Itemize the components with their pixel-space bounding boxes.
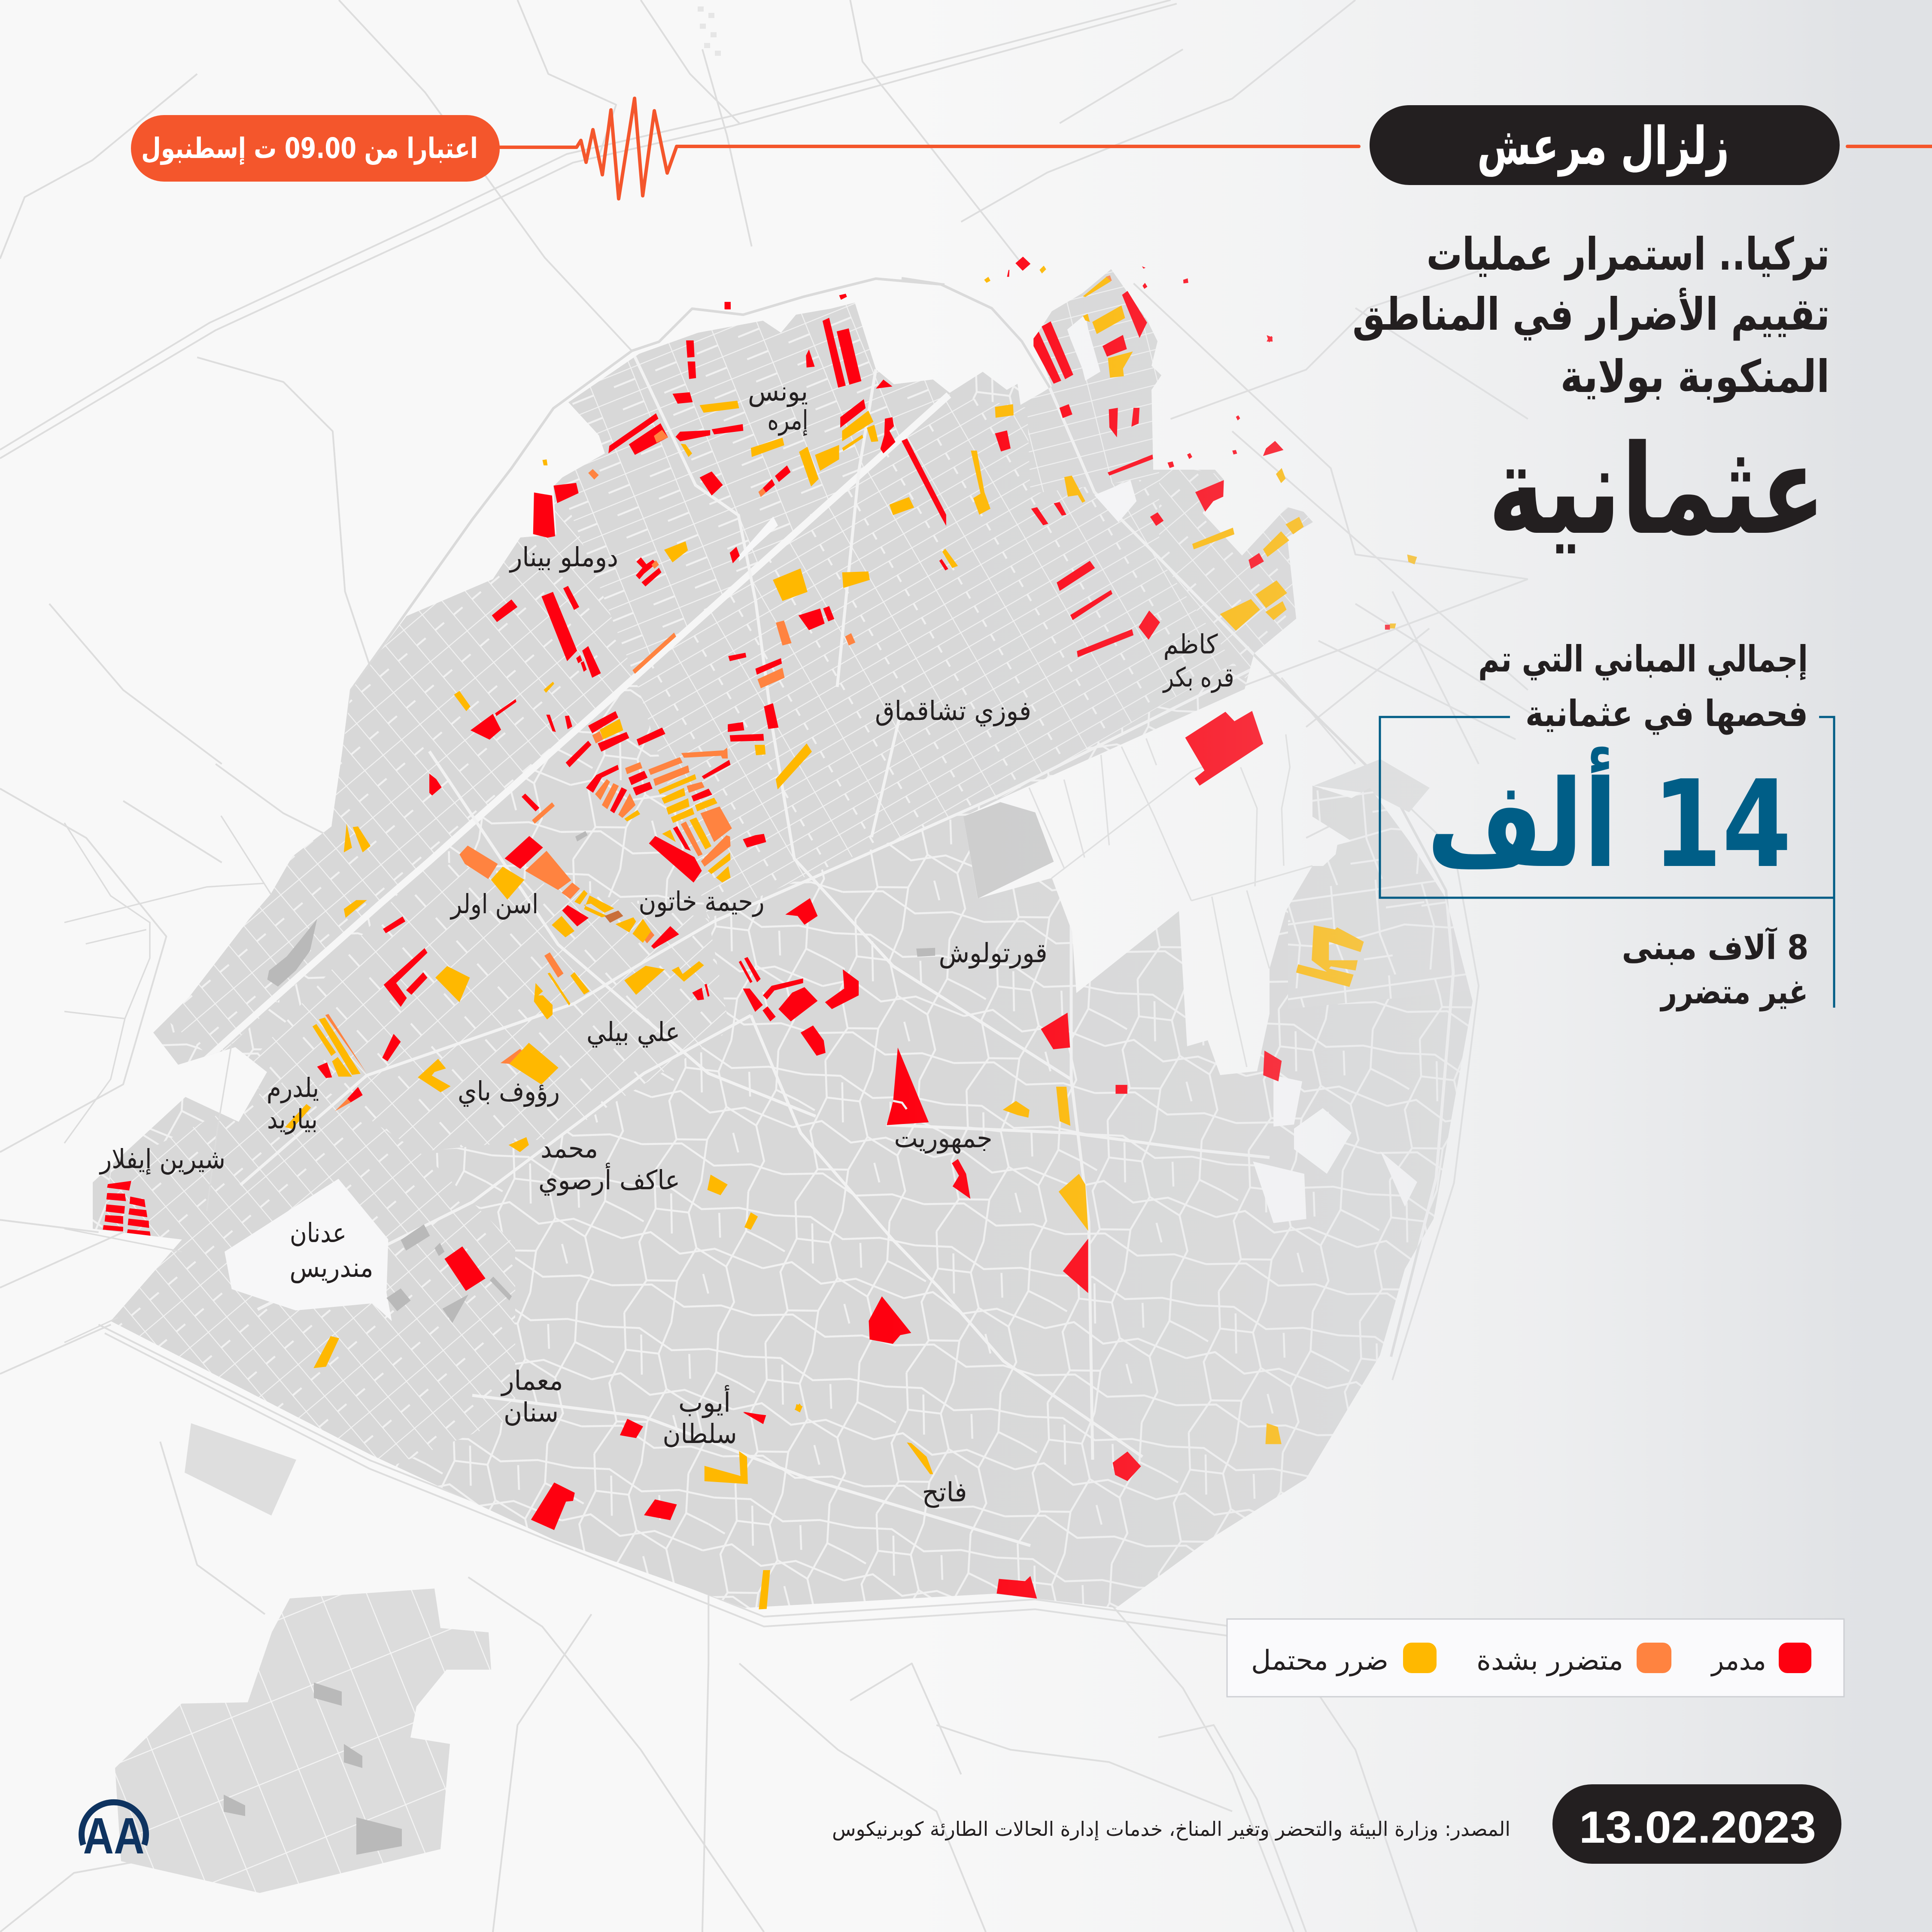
isolated damage markers — [725, 302, 1417, 1481]
neighbourhood labels: بيازيد — [267, 1103, 318, 1135]
neighbourhood labels: يونس — [748, 376, 808, 407]
neighbourhood labels: قره بكر — [1162, 662, 1234, 693]
header badge: زلزال مرعش — [1477, 115, 1729, 177]
date badge: 13.02.2023 — [1579, 1802, 1816, 1853]
neighbourhood labels: مندريس — [289, 1252, 374, 1283]
neighbourhood labels: شيرين إيفلار — [99, 1143, 225, 1175]
title — [1352, 228, 1830, 403]
damage layer: city centre — [429, 691, 859, 1021]
legend: heavily damaged: متضرر بشدة — [1476, 1645, 1623, 1677]
time badge: اعتبارا من 09.00 ت إسطنبول — [141, 132, 478, 165]
seismic line and waveform — [500, 98, 1932, 199]
darker building blocks — [224, 802, 1054, 1855]
statistic caption: إجمالي المباني التي تم — [1478, 638, 1808, 680]
neighbourhood labels: فاتح — [922, 1476, 967, 1508]
south district blocks — [115, 1589, 491, 1893]
legend: destroyed — [1710, 1643, 1811, 1677]
neighbourhood labels: أيوب — [678, 1385, 731, 1418]
province name: عثمانية — [1488, 418, 1826, 562]
legend: heavily damaged — [1476, 1643, 1671, 1677]
title: تركيا.. استمرار عمليات — [1426, 228, 1830, 280]
title: المنكوبة بولاية — [1560, 350, 1830, 403]
statistic value: 14 ألف — [1427, 746, 1792, 895]
dotted blocks at top of map — [698, 6, 721, 56]
statistic caption — [1478, 638, 1808, 735]
source note: المصدر: وزارة البيئة والتحضر وتغير المناخ، خدمات إدارة الحالات الطارئة كوبرنيكوس — [832, 1817, 1510, 1841]
main city blocks — [93, 269, 1473, 1608]
neighbourhood labels: محمد — [541, 1133, 598, 1164]
time badge — [131, 115, 500, 182]
neighbourhood labels: رؤوف باي — [458, 1075, 560, 1107]
damage layer: south centre — [708, 1013, 1127, 1424]
roads over empty zone — [1029, 734, 1312, 1067]
legend: destroyed: مدمر — [1710, 1645, 1766, 1677]
neighbourhood labels: إمره — [768, 404, 808, 436]
header badge — [1370, 105, 1840, 185]
neighbourhood labels: رحيمة خاتون — [639, 886, 764, 917]
faint block near statistics box — [1314, 759, 1430, 812]
empty areas inside the city — [225, 314, 1417, 1321]
damage layer: north west — [492, 294, 914, 693]
neighbourhood labels: عاكف أرصوي — [538, 1163, 680, 1196]
legend: possible damage: ضرر محتمل — [1251, 1645, 1388, 1677]
legend — [1227, 1619, 1844, 1697]
damage layer: west — [103, 823, 559, 1368]
damage layer: east and outlying — [1185, 711, 1364, 1081]
damage layer: south — [531, 1296, 1037, 1609]
icon: AA logo: AA — [83, 1807, 144, 1865]
legend: possible damage — [1251, 1643, 1437, 1677]
neighbourhood labels: كاظم — [1163, 629, 1218, 660]
undamaged note: 8 آلاف مبنى — [1622, 927, 1809, 967]
undamaged note: غير متضرر — [1659, 973, 1808, 1012]
roads west of city — [64, 816, 271, 1343]
neighbourhood labels: سنان — [504, 1397, 559, 1428]
neighbourhood labels: قورتولوش — [939, 937, 1048, 969]
neighbourhood labels: اسن اولر — [450, 888, 538, 920]
neighbourhood labels: فوزي تشاقماق — [875, 695, 1031, 726]
neighbourhood labels: جمهوريت — [894, 1122, 993, 1154]
damage layer: north east — [902, 257, 1304, 657]
neighbourhood labels: يلدرم — [267, 1072, 319, 1103]
title: تقييم الأضرار في المناطق — [1352, 288, 1830, 341]
neighbourhood labels: علي بيلي — [586, 1016, 680, 1048]
statistics box — [1380, 638, 1834, 1012]
neighbourhood labels — [99, 376, 1234, 1508]
neighbourhood labels: عدنان — [290, 1217, 346, 1249]
ring roads around the city — [333, 278, 1453, 1357]
neighbourhood labels: معمار — [501, 1365, 563, 1396]
neighbourhood labels: سلطان — [663, 1418, 737, 1449]
neighbourhood labels: دوملو بينار — [509, 541, 618, 573]
date badge — [1552, 1784, 1841, 1864]
statistic caption: فحصها في عثمانية — [1525, 693, 1808, 735]
light block south west of city — [185, 1423, 296, 1516]
undamaged note — [1622, 927, 1809, 1012]
